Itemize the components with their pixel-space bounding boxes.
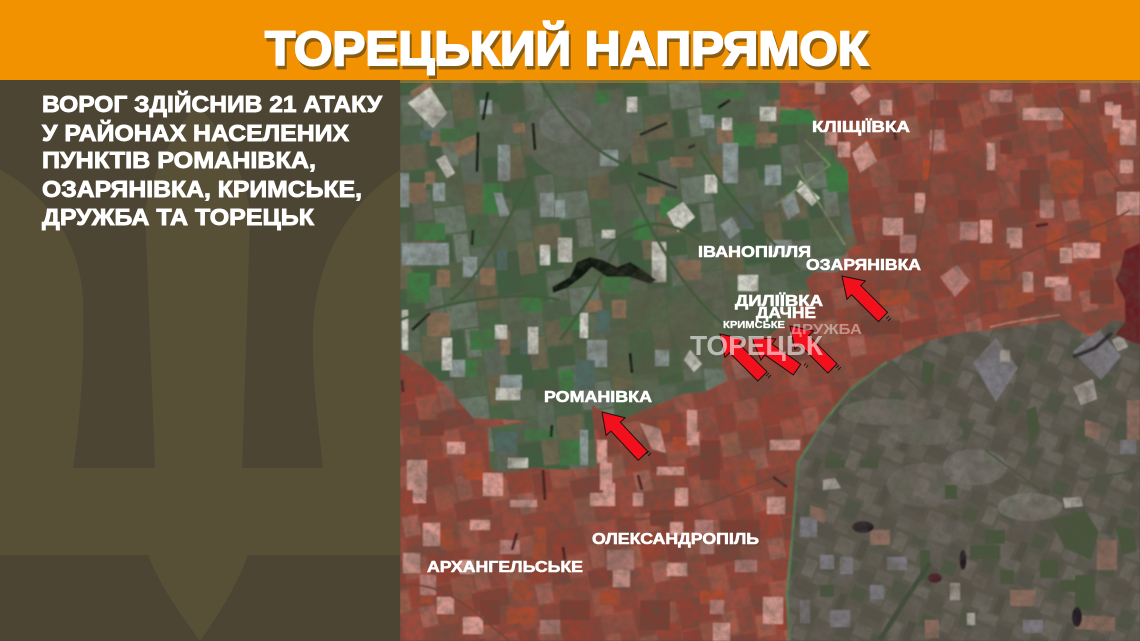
map: dark water bodies: [412, 92, 730, 437]
text block: attack summary: ПУНКТІВ РОМАНІВКА,: [42, 147, 316, 173]
map labels: ОЗАРЯНІВКА: [806, 257, 921, 274]
map labels: ДАЧНЕ: [756, 305, 816, 322]
map labels: [427, 118, 921, 576]
map: occupied city area: [787, 320, 1140, 641]
map labels: АРХАНГЕЛЬСЬКЕ: [427, 559, 583, 576]
text block: attack summary: У РАЙОНАХ НАСЕЛЕНИХ: [42, 119, 350, 146]
map labels: КЛІЩІЇВКА: [812, 118, 911, 136]
title: ТОРЕЦЬКИЙ НАПРЯМОК: [267, 24, 871, 80]
map labels: ДИЛІЇВКА: [735, 292, 824, 310]
map: occupied territory in red: [400, 80, 1140, 641]
map labels: КРИМСЬКЕ: [723, 319, 785, 331]
map: [400, 80, 1140, 641]
map labels: ДРУЖБА: [790, 321, 862, 338]
panel: left sidebar: [0, 80, 400, 641]
map labels: ТОРЕЦЬК: [690, 330, 824, 361]
header bar: [0, 0, 1140, 80]
arrow: Romanivka attack: [592, 403, 652, 465]
arrow: Ozarianivka attack: [833, 267, 892, 326]
map labels: ІВАНОПІЛЛЯ: [698, 244, 811, 261]
arrow: Druzhba attack: [781, 317, 842, 378]
text block: attack summary: ОЗАРЯНІВКА, КРИМСЬКЕ,: [42, 176, 362, 202]
map labels: ОЛЕКСАНДРОПІЛЬ: [592, 531, 759, 548]
text block: attack summary: ДРУЖБА ТА ТОРЕЦЬК: [42, 204, 315, 230]
text block: attack summary: [42, 90, 383, 230]
arrow: Kryms'ke attack: [711, 325, 772, 386]
map labels: РОМАНІВКА: [544, 389, 652, 406]
map: defended area fields: [400, 80, 848, 468]
icon: trident watermark: [0, 105, 400, 641]
text block: attack summary: ВОРОГ ЗДІЙСНИВ 21 АТАКУ: [42, 90, 383, 117]
title: ТОРЕЦЬКИЙ НАПРЯМОК: [265, 21, 869, 76]
arrow: Toretsk attack: [745, 327, 808, 380]
